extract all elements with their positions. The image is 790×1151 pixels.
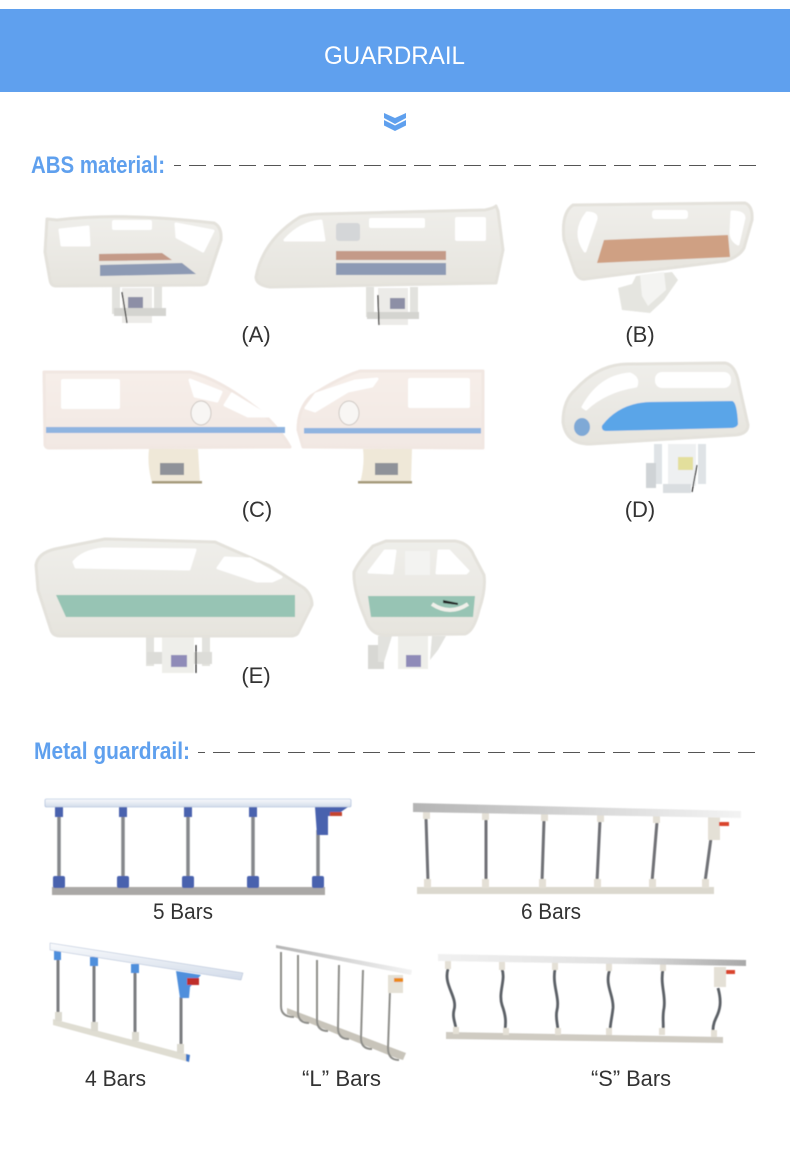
- rail: 5 bars: [45, 799, 351, 895]
- header banner: [0, 9, 790, 92]
- panel A right: [256, 206, 503, 325]
- label: L bars: “L” Bars: [302, 1066, 381, 1091]
- heading: Metal guardrail: Metal guardrail:: [34, 738, 190, 765]
- panel D: [563, 363, 748, 493]
- panel B: [563, 203, 752, 313]
- label E: (E): [241, 663, 271, 688]
- label C: (C): [242, 497, 272, 522]
- label D: (D): [625, 497, 655, 522]
- rail: L bars: [276, 945, 412, 1060]
- title: GUARDRAIL: [324, 42, 465, 70]
- panel A left: [45, 217, 221, 323]
- heading: ABS material: ABS material:: [31, 152, 165, 179]
- rail: 6 bars: [413, 803, 741, 894]
- rail: 4 bars: [50, 943, 243, 1062]
- panel C right: [298, 371, 483, 484]
- label: 5 bars: 5 Bars: [153, 899, 213, 924]
- label: 4 bars: 4 Bars: [85, 1066, 146, 1091]
- panel E right: [354, 541, 484, 669]
- label: 6 bars: 6 Bars: [521, 899, 581, 924]
- panel E left: [36, 539, 312, 673]
- label: S bars: “S” Bars: [591, 1066, 671, 1091]
- label A: (A): [241, 322, 271, 347]
- panel C left: [44, 372, 290, 484]
- label B: (B): [625, 322, 655, 347]
- icon: double chevron down: [384, 113, 406, 131]
- rail: S bars: [438, 954, 746, 1043]
